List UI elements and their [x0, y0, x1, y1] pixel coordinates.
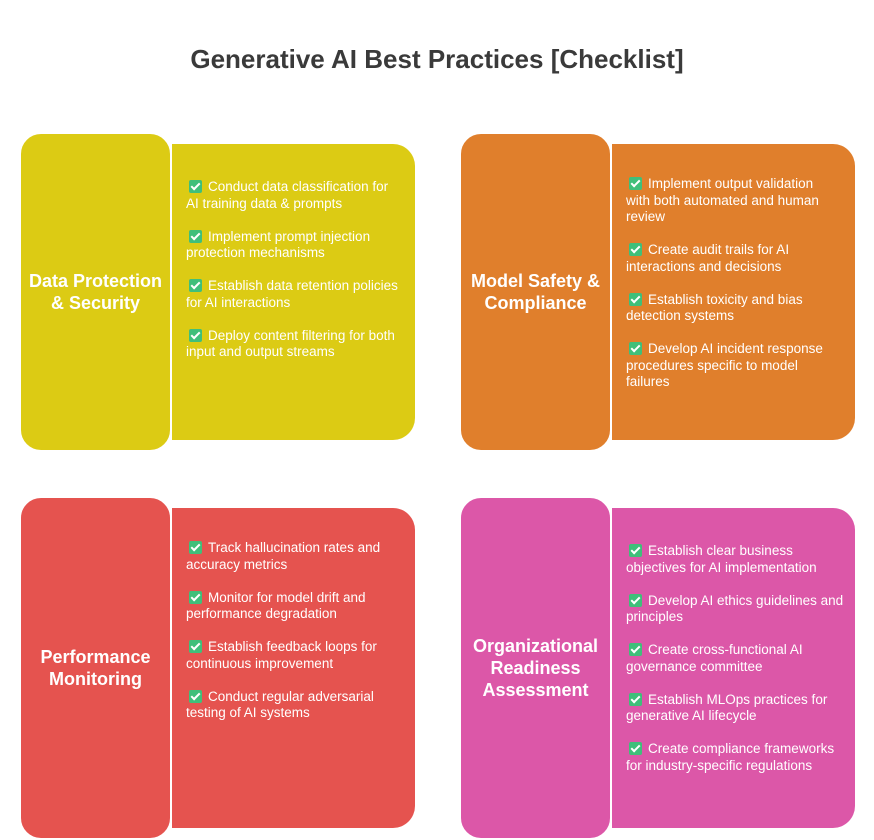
- content box: model safety: procedures specific to model: [626, 358, 798, 372]
- content box: data protection: [172, 144, 415, 440]
- content box: performance: performance degradation: [186, 606, 337, 621]
- heading tab: data protection: Data Protection: [29, 271, 162, 291]
- content box: model safety: Implement output validation: [648, 176, 813, 191]
- content box: organizational: Establish clear business: [648, 543, 793, 558]
- panel: organizational readiness: [461, 498, 855, 838]
- content box: performance: Establish feedback loops for: [208, 639, 377, 654]
- content box: organizational: Create compliance frameworks: [648, 741, 834, 756]
- content box: organizational: generative AI lifecycle: [626, 708, 757, 723]
- heading tab: performance: Monitoring: [49, 669, 142, 689]
- content box: model safety: Create audit trails for AI: [648, 242, 789, 257]
- heading tab: organizational: [459, 496, 612, 840]
- content box: organizational: for industry-specific regulations: [626, 758, 812, 772]
- heading tab: organizational: Readiness: [490, 658, 581, 678]
- content box: performance: testing of AI systems: [186, 705, 310, 720]
- content box: performance: Monitor for model drift and: [208, 590, 366, 604]
- content box: model safety: failures: [626, 374, 670, 389]
- content box: data protection: Implement prompt injection: [208, 228, 370, 244]
- content box: data protection: Establish data retention policies: [208, 278, 398, 293]
- content box: data protection: protection mechanisms: [186, 245, 325, 260]
- content box: model safety: Develop AI incident response: [648, 341, 823, 356]
- content box: model safety: review: [626, 209, 665, 224]
- heading tab: model safety: Model Safety &: [471, 271, 600, 291]
- content box: model safety: with both automated and human: [626, 192, 819, 208]
- panel: data protection: [21, 134, 415, 450]
- content box: performance: Track hallucination rates and: [208, 540, 380, 555]
- content box: model safety: detection systems: [626, 308, 734, 323]
- heading tab: model safety: Compliance: [484, 293, 587, 313]
- heading tab: organizational: Organizational: [473, 636, 598, 656]
- heading tab: data protection: [19, 132, 172, 452]
- content box: performance: accuracy metrics: [186, 556, 287, 572]
- content box: data protection: Deploy content filtering for both: [208, 328, 395, 342]
- content box: organizational: objectives for AI implementation: [626, 560, 817, 574]
- content box: data protection: AI training data & prompts: [186, 196, 342, 210]
- content box: data protection: input and output streams: [186, 344, 335, 359]
- heading tab: performance: [19, 496, 172, 840]
- content box: performance: continuous improvement: [186, 656, 333, 670]
- content box: organizational: [612, 508, 855, 828]
- content box: organizational: Establish MLOps practices for: [648, 692, 827, 706]
- content box: organizational: principles: [626, 609, 683, 624]
- heading tab: model safety: [459, 132, 612, 452]
- content box: data protection: for AI interactions: [186, 294, 290, 310]
- content box: organizational: Develop AI ethics guidelines and: [648, 592, 843, 608]
- content box: performance: Conduct regular adversarial: [208, 688, 374, 704]
- content box: model safety: [612, 144, 855, 440]
- title: Generative AI Best Practices [Checklist]: [190, 44, 684, 74]
- heading tab: data protection: & Security: [51, 293, 140, 313]
- content box: performance: [172, 508, 415, 828]
- panel: performance monitoring: [21, 498, 415, 838]
- content box: model safety: interactions and decisions: [626, 258, 781, 274]
- content box: model safety: Establish toxicity and bias: [648, 292, 803, 306]
- heading tab: performance: Performance: [40, 647, 151, 667]
- panel: model safety: [461, 134, 855, 450]
- content box: organizational: governance committee: [626, 658, 763, 674]
- content box: organizational: Create cross-functional AI: [648, 642, 803, 657]
- content box: data protection: Conduct data classification for: [208, 179, 388, 194]
- heading tab: organizational: Assessment: [482, 680, 589, 700]
